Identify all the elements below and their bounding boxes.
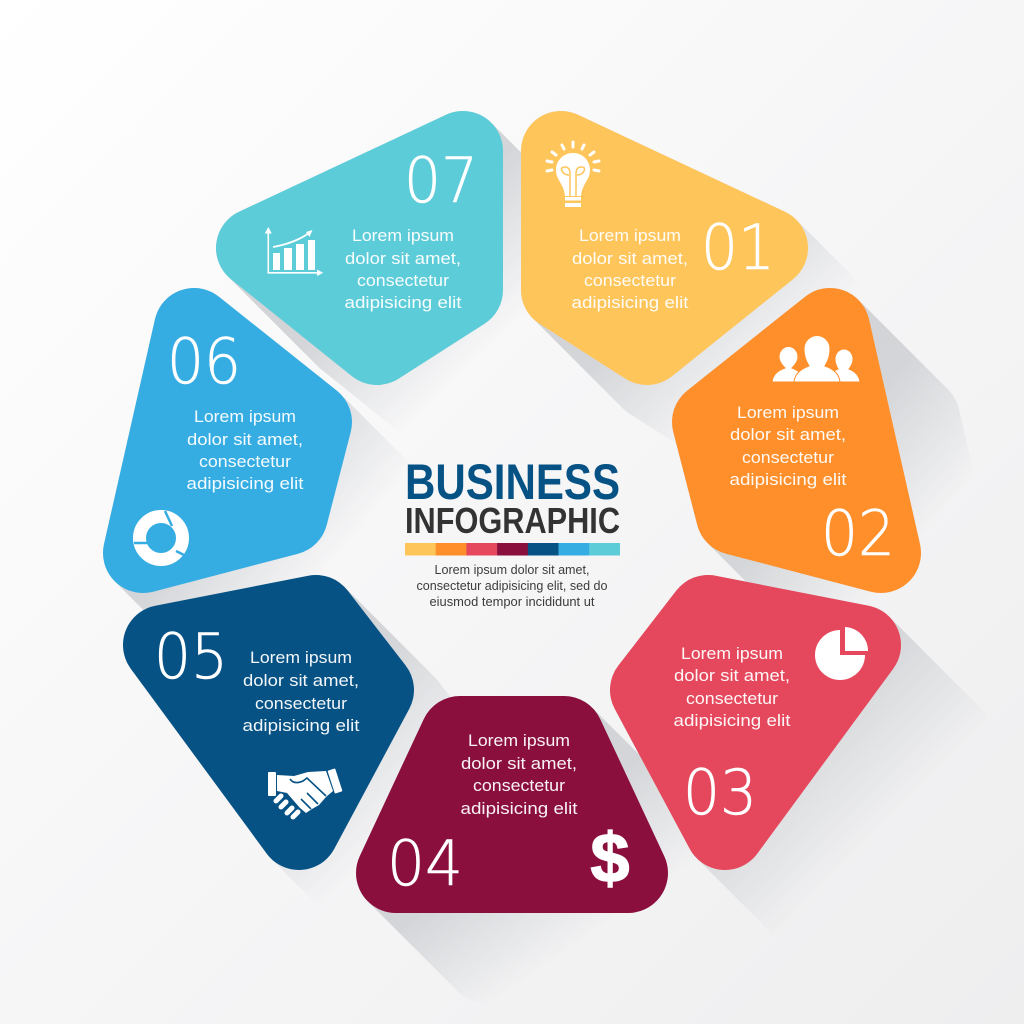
text 04: adipisicing elit (460, 800, 578, 818)
shape 04 (396, 736, 628, 873)
panel 01 (547, 142, 775, 345)
long shadows (103, 111, 966, 992)
text 05 (242, 649, 360, 735)
number 05: 05 (154, 620, 228, 693)
number 06: 06 (167, 325, 241, 398)
number 03: 03 (683, 756, 757, 829)
description: consectetur adipisicing elit, sed do (416, 579, 608, 593)
number 01: 01 (701, 211, 775, 284)
text 06: adipisicing elit (186, 475, 304, 493)
text 03: adipisicing elit (674, 712, 791, 730)
text 06: dolor sit amet, (187, 431, 303, 449)
text 07: dolor sit amet, (345, 250, 461, 268)
text 01: consectetur (584, 272, 677, 290)
shape 07 (256, 151, 463, 345)
text 04 (460, 732, 578, 818)
shape 01 (561, 151, 768, 345)
panel 06 (134, 325, 312, 560)
colour strip (405, 543, 620, 556)
text 02 (730, 404, 847, 489)
text 04: consectetur (473, 777, 566, 795)
panel 04 (387, 732, 629, 900)
description (416, 563, 608, 609)
panel 02 (712, 328, 895, 570)
icon: dollar: $ (591, 819, 629, 897)
text 03: consectetur (686, 690, 779, 708)
text 05: Lorem ipsum (250, 649, 352, 667)
text 03: dolor sit amet, (674, 667, 790, 685)
title: business: BUSINESS (405, 454, 620, 510)
shape 02 (712, 328, 881, 553)
text 07: consectetur (357, 272, 450, 290)
text 05: adipisicing elit (242, 717, 360, 735)
text 01: Lorem ipsum (579, 227, 681, 245)
text 07 (344, 227, 462, 312)
text 02: adipisicing elit (730, 471, 847, 489)
number 02: 02 (821, 497, 895, 570)
text 02: Lorem ipsum (737, 404, 839, 422)
number 04: 04 (387, 827, 463, 900)
panel 05 (154, 615, 374, 830)
shape 06 (143, 328, 312, 553)
shape 05 (163, 615, 374, 830)
title: infographic: INFOGRAPHIC (405, 500, 620, 541)
shape 03 (650, 615, 861, 830)
text 01: dolor sit amet, (572, 250, 688, 268)
text 03 (674, 645, 791, 730)
description: eiusmod tempor incididunt ut (430, 595, 595, 609)
number 07: 07 (404, 144, 478, 217)
text 06: Lorem ipsum (194, 408, 296, 426)
icon: growth chart (265, 227, 323, 276)
icon: cycle arrows (134, 511, 190, 560)
text 01 (572, 227, 689, 312)
icon: light bulb (547, 142, 599, 207)
text 05: consectetur (255, 695, 348, 713)
text 07: adipisicing elit (344, 294, 462, 312)
text 01: adipisicing elit (572, 294, 689, 312)
text 05: dolor sit amet, (243, 672, 359, 690)
panel 03 (650, 615, 868, 830)
icon: handshake (268, 768, 343, 817)
text 04: dolor sit amet, (461, 755, 577, 773)
icon: pie chart (815, 627, 868, 680)
text 02: dolor sit amet, (730, 426, 846, 444)
text 06 (186, 408, 304, 493)
text 06: consectetur (199, 453, 292, 471)
icon: people (772, 336, 860, 382)
central title block (405, 454, 620, 609)
text 04: Lorem ipsum (468, 732, 570, 750)
description: Lorem ipsum dolor sit amet, (434, 563, 590, 577)
text 03: Lorem ipsum (681, 645, 783, 663)
panel 07 (256, 144, 478, 345)
text 07: Lorem ipsum (352, 227, 454, 245)
text 02: consectetur (742, 449, 835, 467)
